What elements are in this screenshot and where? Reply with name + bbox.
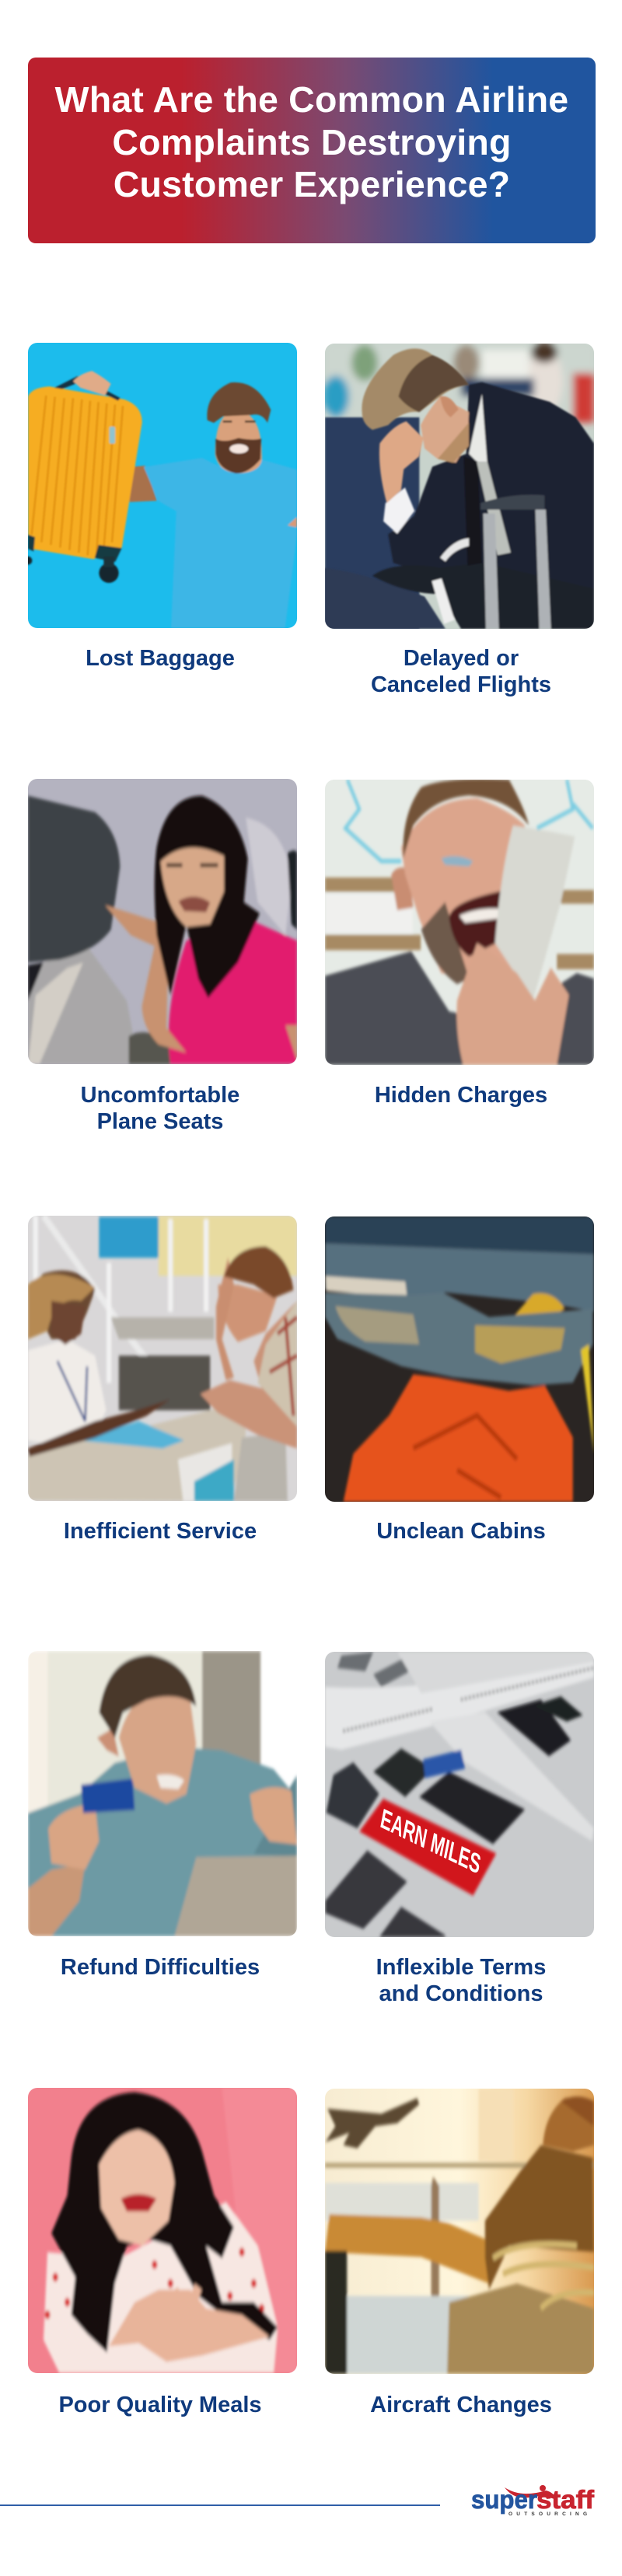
label: inflexible terms and conditions: and Conditions: [379, 1981, 543, 2006]
label: uncomfortable plane seats: Uncomfortable: [81, 1083, 239, 1108]
photo: businessman with delayed flight: [325, 344, 594, 629]
title: What Are the Common Airline: [55, 79, 568, 120]
photo: airport lounge and aircraft: [325, 2089, 594, 2374]
key text: EARN MILES: [378, 1803, 483, 1880]
label: unclean cabins: Unclean Cabins: [376, 1519, 546, 1544]
logo: superstaff outsourcing: [471, 2485, 595, 2517]
title: Complaints Destroying: [112, 121, 512, 162]
photo: woman on uncomfortable plane seat: [28, 779, 297, 1064]
photo: inefficient airport service desk: [28, 1216, 297, 1501]
label: inefficient service: Inefficient Service: [64, 1519, 257, 1544]
label: aircraft changes: Aircraft Changes: [370, 2393, 552, 2417]
wordmark: super: [471, 2485, 537, 2514]
label: delayed or canceled flights: Delayed or: [404, 646, 519, 671]
label: uncomfortable plane seats: [81, 1083, 239, 1134]
title: [54, 79, 568, 204]
label: lost baggage: Lost Baggage: [86, 646, 235, 671]
label: delayed or canceled flights: Canceled Flights: [371, 672, 551, 697]
label: inflexible terms and conditions: Inflexible Terms: [376, 1955, 546, 1980]
swoosh: [505, 2487, 557, 2500]
logo: superstaff outsourcing: staff: [536, 2485, 595, 2514]
label: delayed or canceled flights: [371, 646, 551, 697]
photo: angry man with credit card: [28, 1651, 297, 1936]
photo: woman disgusted by meal: [28, 2088, 297, 2373]
label: uncomfortable plane seats: Plane Seats: [97, 1109, 223, 1134]
label: poor quality meals: Poor Quality Meals: [58, 2393, 262, 2417]
label: hidden charges: Hidden Charges: [375, 1083, 547, 1108]
title: Customer Experience?: [114, 164, 510, 204]
photo: man with lost baggage: [28, 343, 297, 628]
label: refund difficulties: Refund Difficulties: [61, 1955, 260, 1980]
photo: unclean cabin seat pocket: [325, 1216, 594, 1502]
label: inflexible terms and conditions: [376, 1955, 546, 2006]
photo: earn miles keyboard and model plane: [325, 1652, 594, 1937]
title banner: [28, 58, 596, 243]
photo: man yelling about hidden charges: [325, 780, 594, 1065]
footer line: [0, 2504, 440, 2506]
tagline: OUTSOURCING: [508, 2511, 587, 2517]
